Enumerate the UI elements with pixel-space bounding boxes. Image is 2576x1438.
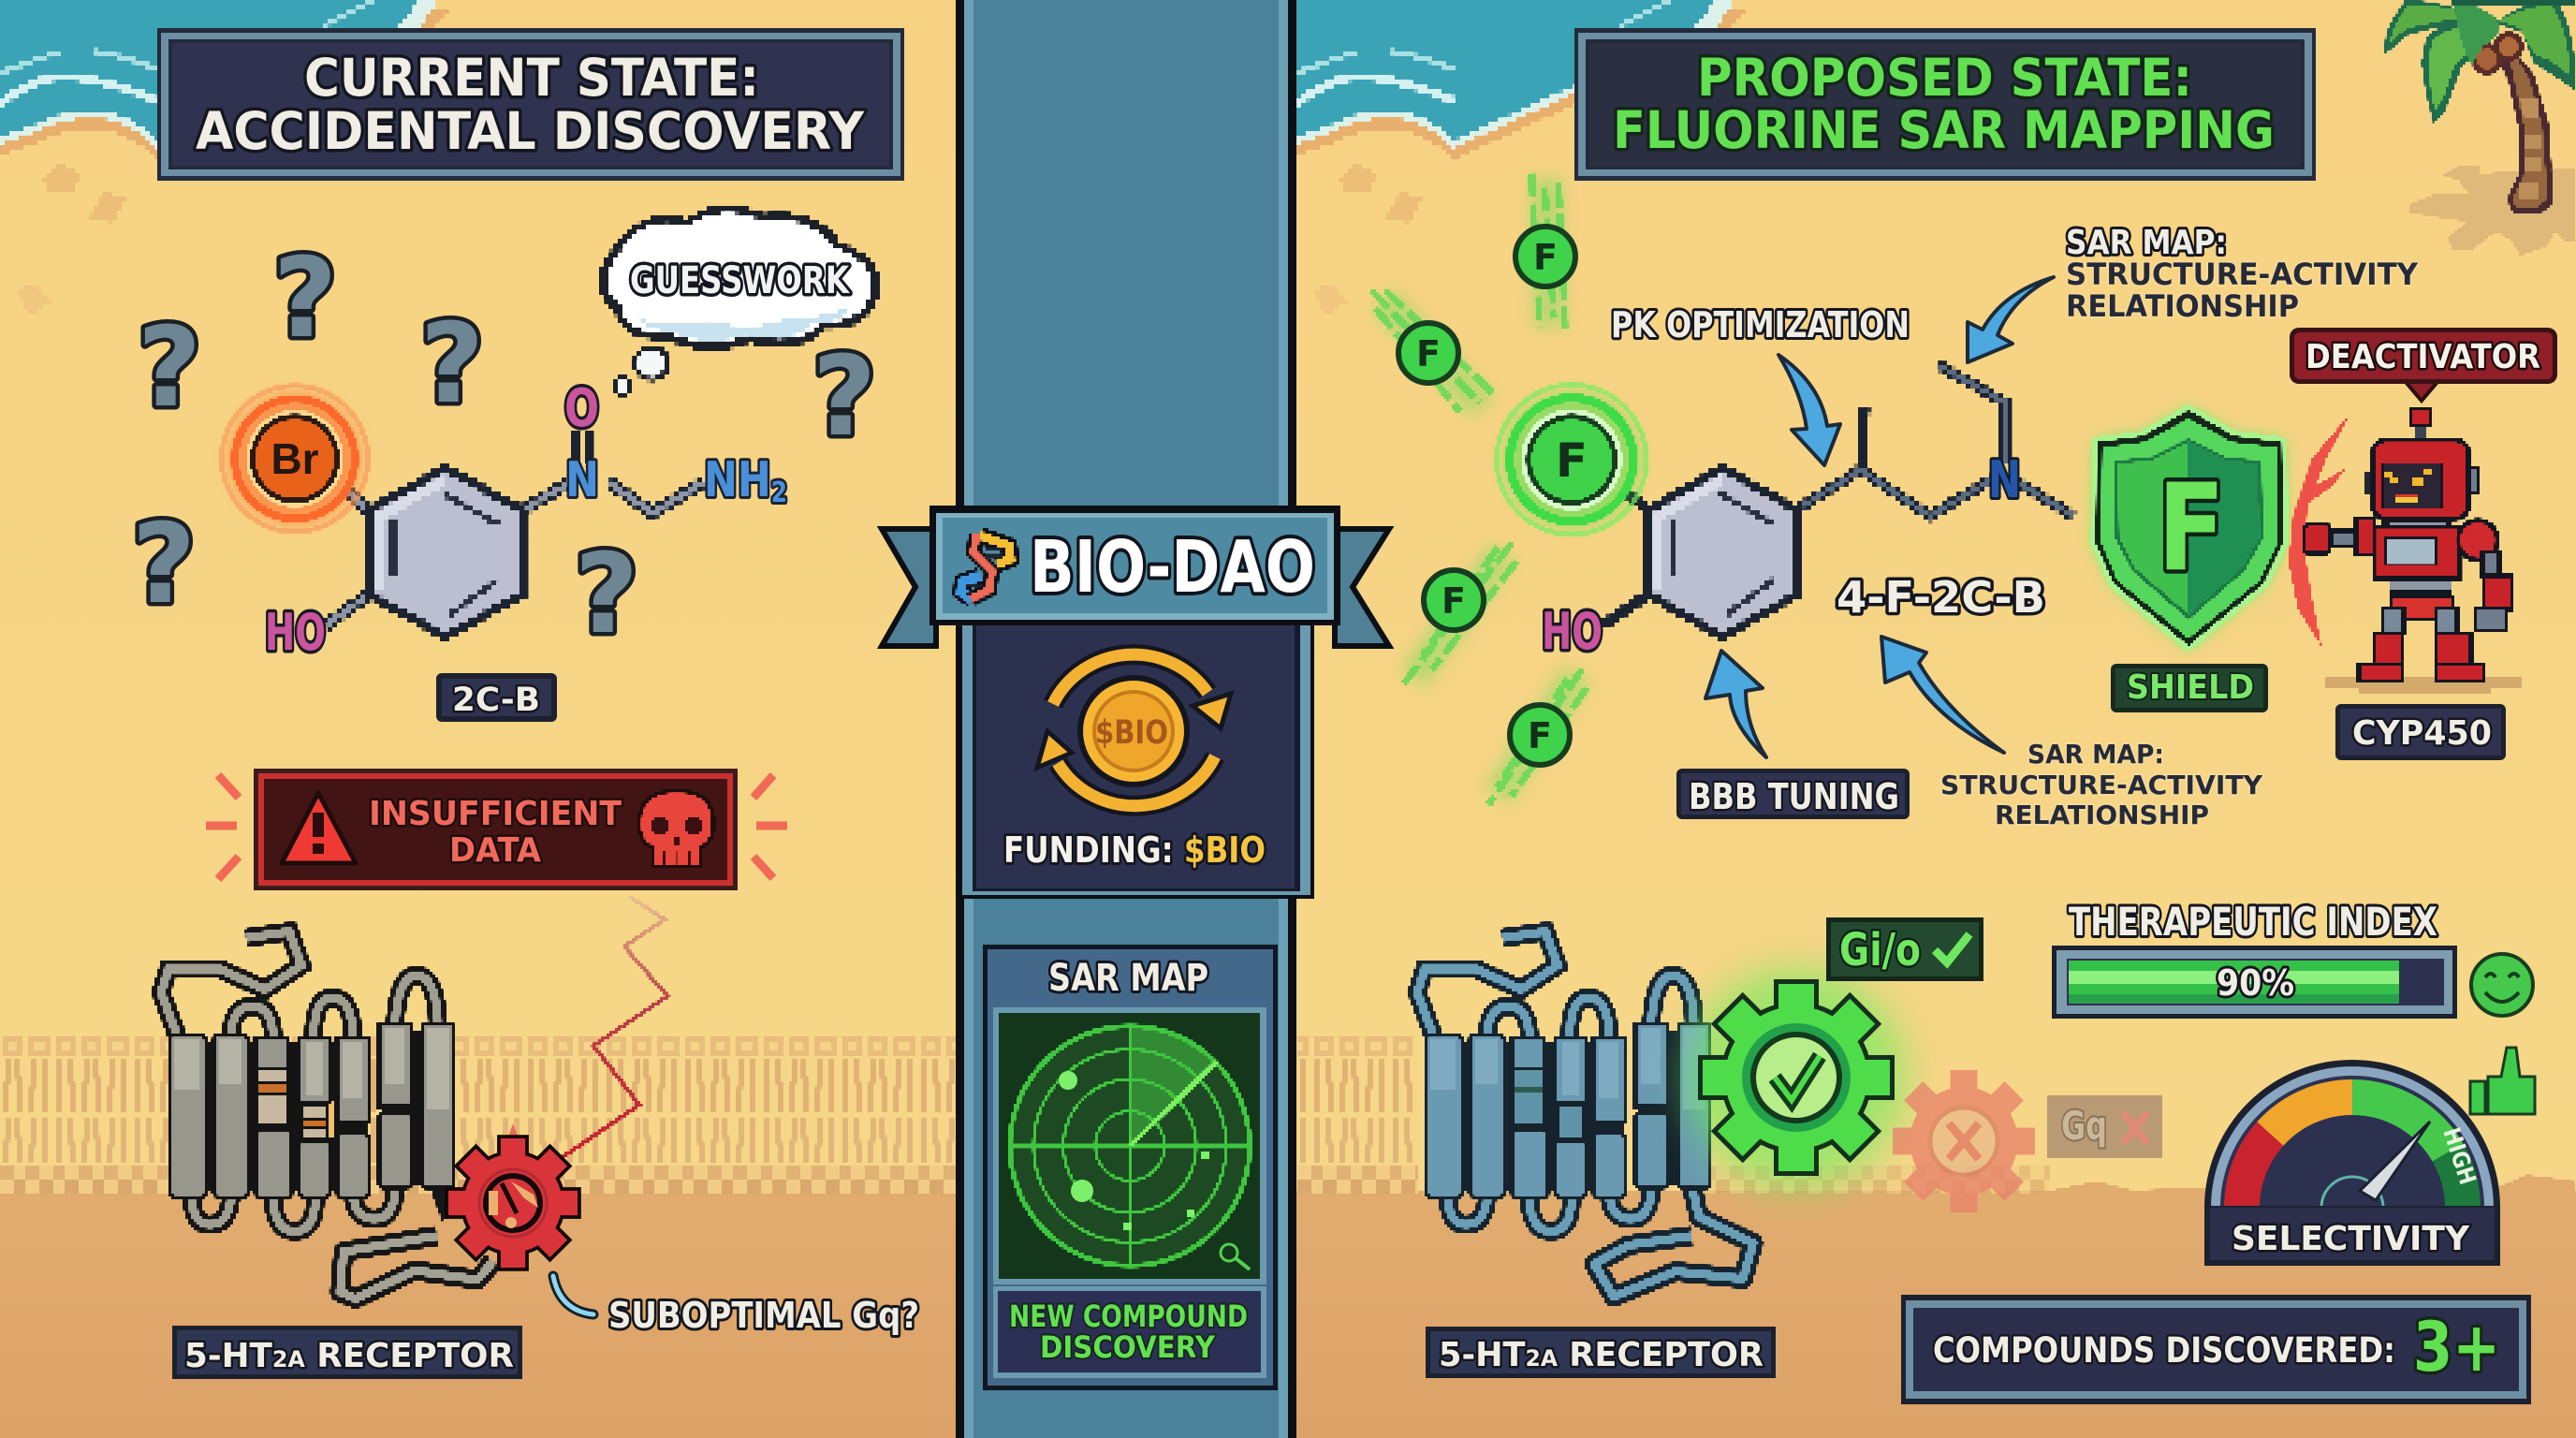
title: current state — [157, 28, 904, 181]
molecule: 4-F-2C-B: N — [1988, 450, 2021, 509]
panel: proposed state — [1371, 0, 2576, 1404]
label: shield: SHIELD — [2127, 668, 2254, 707]
thought bubble: guesswork — [603, 209, 877, 394]
icon: palm tree — [2384, 0, 2576, 256]
icon: thumbs up — [2470, 1048, 2535, 1114]
title: proposed state: FLUORINE SAR MAPPING — [1613, 100, 2275, 160]
question marks: ? — [420, 299, 484, 428]
icon: Gq inactive gear — [1893, 1070, 2035, 1212]
icon: skull — [639, 791, 713, 866]
title: current state: ACCIDENTAL DISCOVERY — [196, 101, 865, 161]
label: new compound discovery: NEW COMPOUND — [1009, 1299, 1248, 1334]
annotation: SAR map lower: SAR MAP: — [2027, 739, 2164, 770]
panel: compounds discovered: COMPOUNDS DISCOVERED: — [1933, 1330, 2395, 1371]
rays — [206, 775, 787, 879]
icon: fluorine shield: F — [2158, 459, 2225, 598]
callout: suboptimal Gq — [553, 1276, 919, 1336]
label: new compound discovery — [993, 1286, 1266, 1378]
receptor: 5-HT2A blue — [1417, 932, 1753, 1297]
banner: BIO-DAO — [929, 506, 1340, 625]
badge: Gq blocked — [2047, 1095, 2162, 1158]
arrow: BBB to ring — [1705, 651, 1766, 757]
question marks: ? — [575, 529, 638, 658]
annotation: SAR map lower: STRUCTURE-ACTIVITY — [1940, 770, 2263, 800]
molecule: 2C-B: NH — [704, 452, 785, 508]
panel: compounds discovered: 3+ — [2413, 1308, 2500, 1387]
molecule: 2C-B — [265, 378, 787, 662]
gauge: selectivity: HIGH — [2437, 1124, 2481, 1188]
gauge: selectivity — [2204, 1060, 2500, 1266]
panel: SAR map: SAR MAP — [1048, 957, 1208, 1000]
label: PK optimization: PK OPTIMIZATION — [1611, 304, 1910, 345]
icon: fluorine shield — [2093, 407, 2286, 649]
icon: $BIO coin with cycle arrows — [1037, 654, 1231, 806]
panel: center column — [882, 0, 1389, 1438]
label: CYP450: CYP450 — [2352, 714, 2492, 753]
molecule: 2C-B: N — [565, 452, 599, 508]
molecule: 2C-B: O — [564, 378, 599, 439]
annotation: SAR map upper: SAR MAP: — [2066, 224, 2227, 262]
icon: warning triangle — [282, 793, 356, 863]
background: cell membrane left — [0, 1034, 964, 1193]
question marks: ? — [812, 331, 876, 461]
label: 2C-B — [436, 673, 557, 722]
arrow: SAR map to label — [1881, 637, 2004, 753]
icon: CYP450 robot — [2289, 409, 2521, 693]
label: shield — [2111, 664, 2268, 712]
annotation: SAR map upper — [2066, 224, 2419, 324]
icon: DNA helix — [961, 534, 1011, 599]
label: therapeutic index: THERAPEUTIC INDEX — [2069, 899, 2437, 945]
icon: key fluorine atom — [1497, 385, 1647, 535]
fluorine atoms with streaks: F — [1533, 237, 1558, 278]
title: current state: CURRENT STATE: — [304, 48, 759, 108]
badge: Gi/o check: Gi/o — [1839, 924, 1921, 976]
label: 5-HT2A receptor: 5-HT2A RECEPTOR — [1439, 1336, 1764, 1374]
annotation: SAR map lower: RELATIONSHIP — [1995, 800, 2209, 830]
icon: smiley — [2471, 954, 2533, 1016]
ribbon tails — [882, 529, 1389, 646]
callout: deactivator — [2290, 328, 2557, 401]
icon: Gi/o active gear — [1686, 967, 1907, 1188]
signal squiggle — [560, 897, 667, 1159]
label: CYP450 — [2335, 704, 2506, 760]
callout: deactivator: DEACTIVATOR — [2305, 338, 2540, 376]
icon: bromine atom — [222, 386, 368, 532]
question marks: ? — [138, 302, 201, 432]
arrow: PK to chain — [1778, 355, 1840, 465]
gauge: selectivity: SELECTIVITY — [2232, 1220, 2470, 1258]
label: 5-HT2A receptor: 5-HT2A RECEPTOR — [184, 1337, 514, 1375]
badge: Gq blocked: Gq — [2061, 1103, 2107, 1149]
title: proposed state: PROPOSED STATE: — [1697, 48, 2192, 108]
icon: broken red gear — [448, 1123, 578, 1268]
alert: insufficient data: DATA — [449, 831, 541, 870]
molecule: 4-F-2C-B: HO — [1542, 602, 1603, 661]
arrow: SAR map to chain — [1968, 277, 2054, 362]
radar screen — [999, 1013, 1260, 1279]
callout: suboptimal Gq: SUBOPTIMAL Gq? — [608, 1295, 919, 1336]
label: 4-F-2C-B: 4-F-2C-B — [1837, 572, 2045, 623]
icon: key fluorine atom: F — [1556, 433, 1588, 488]
bar chart: therapeutic index 90% — [2052, 946, 2457, 1019]
molecule: 4-F-2C-B — [1542, 365, 2073, 661]
fluorine atoms with streaks: F — [1416, 333, 1441, 374]
panel: current state — [132, 28, 919, 1379]
banner: BIO-DAO: BIO-DAO — [1030, 526, 1315, 609]
question marks: ? — [132, 499, 196, 628]
background: cell membrane right — [1296, 1034, 2576, 1203]
badge: Gi/o check — [1826, 917, 1983, 981]
bar chart: therapeutic index 90%: 90% — [2217, 962, 2294, 1004]
background: ground — [0, 1191, 2576, 1438]
label: 5-HT2A receptor — [172, 1326, 522, 1379]
label: 2C-B: 2C-B — [452, 682, 540, 719]
receptor: 5-HT2A grey — [161, 897, 667, 1299]
annotation: SAR map upper: RELATIONSHIP — [2066, 288, 2299, 324]
label: new compound discovery: DISCOVERY — [1040, 1329, 1216, 1365]
icon: bromine atom: Br — [271, 434, 319, 483]
alert: insufficient data — [206, 769, 787, 890]
fluorine atoms with streaks — [1371, 173, 1587, 805]
panel: funding — [956, 625, 1314, 899]
annotation: SAR map upper: STRUCTURE-ACTIVITY — [2066, 257, 2419, 292]
panel: compounds discovered — [1901, 1295, 2531, 1404]
text: funding $BIO: FUNDING: $BIO — [1003, 829, 1266, 871]
molecule: 2C-B: HO — [265, 603, 326, 662]
label: BBB tuning: BBB TUNING — [1689, 776, 1899, 817]
panel: SAR map — [983, 945, 1278, 1390]
annotation: SAR map lower — [1940, 739, 2263, 830]
alert: insufficient data: INSUFFICIENT — [369, 795, 622, 833]
question marks: ? — [273, 233, 337, 362]
molecule: 2C-B: 2 — [771, 477, 787, 509]
icon: $BIO coin with cycle arrows: $BIO — [1095, 714, 1168, 752]
title: proposed state — [1574, 28, 2316, 181]
question marks — [132, 233, 876, 658]
thought bubble: guesswork: GUESSWORK — [630, 259, 851, 302]
fluorine atoms with streaks: F — [1528, 715, 1552, 756]
background: shoreline right — [1287, 0, 1746, 316]
fluorine atoms with streaks: F — [1442, 580, 1466, 622]
background: shoreline left — [0, 0, 449, 316]
